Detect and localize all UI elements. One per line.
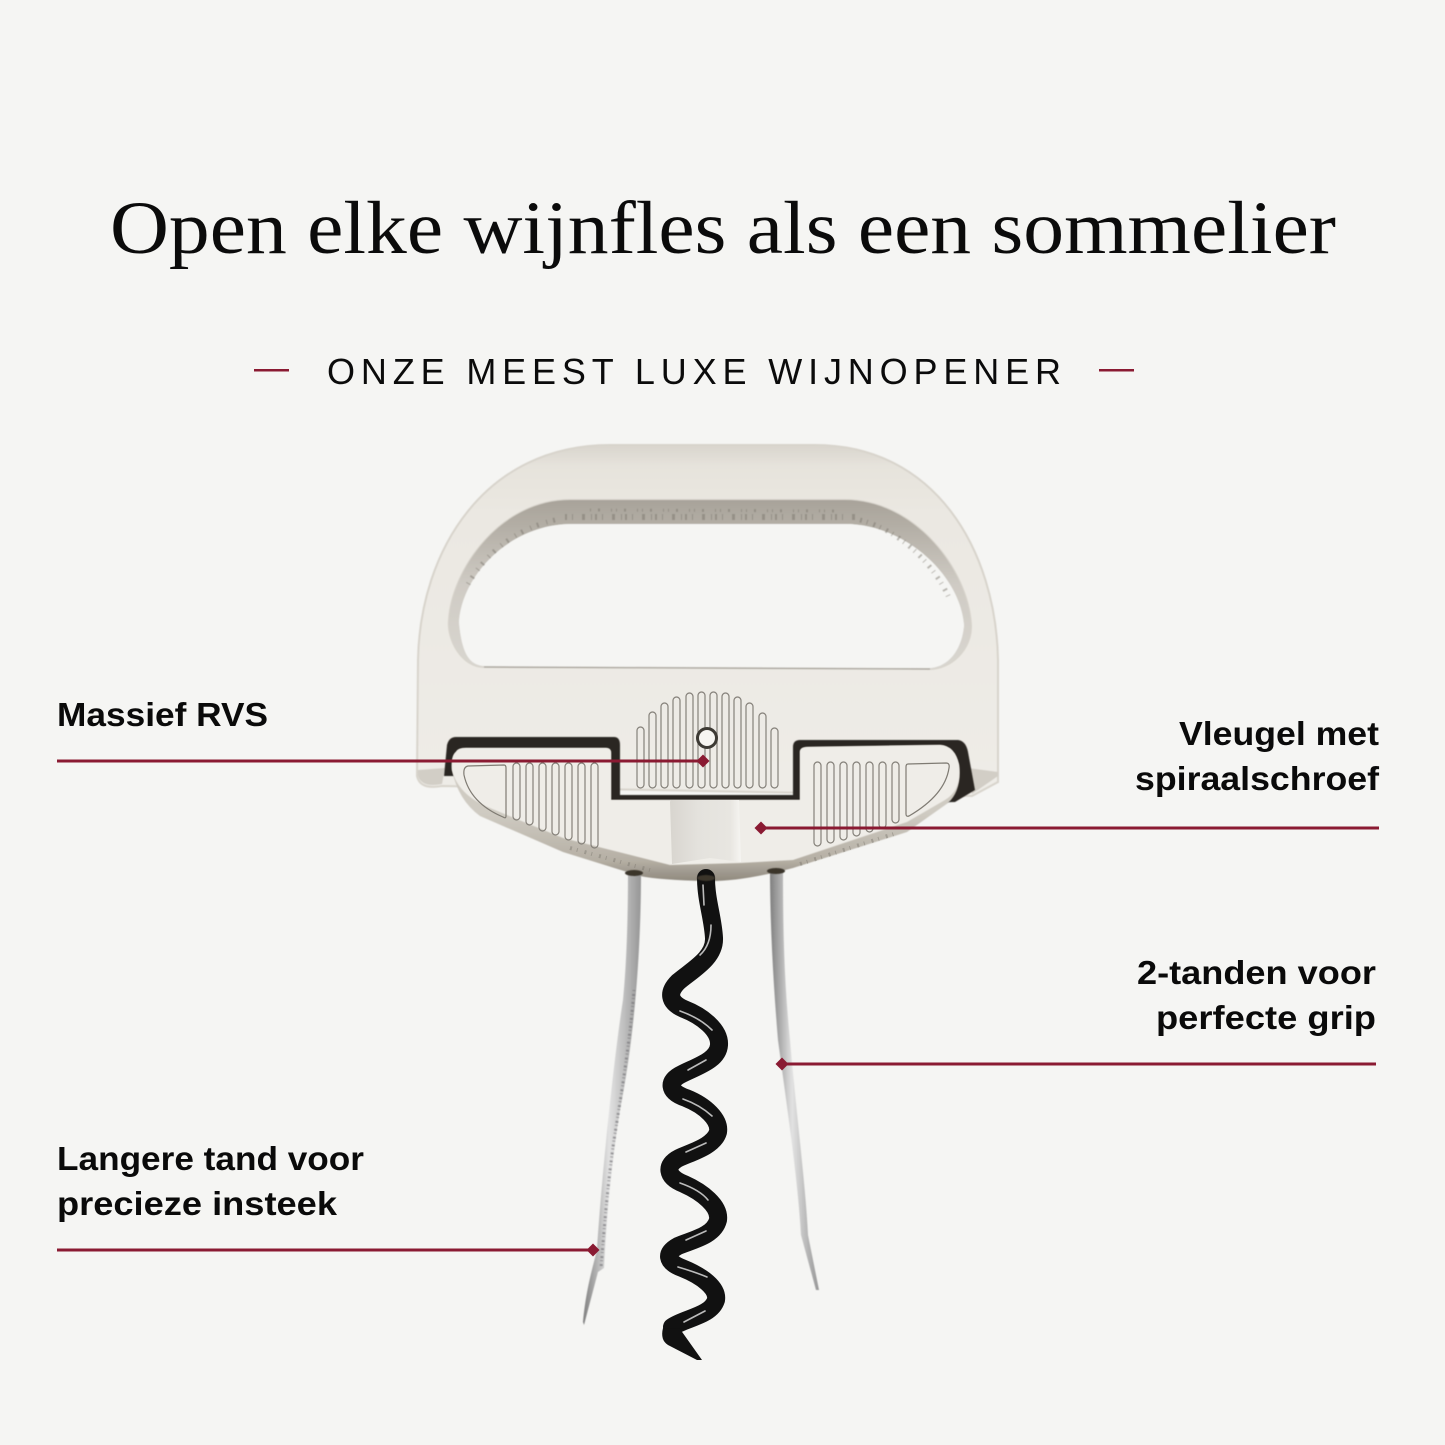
tine pins bbox=[625, 868, 785, 881]
wing top face bbox=[452, 745, 959, 865]
wing underside speckle bbox=[570, 832, 900, 870]
handle body bbox=[417, 445, 998, 796]
subtitle with dashes: ONZE MEEST LUXE WIJNOPENER bbox=[327, 351, 1061, 392]
left tine bbox=[583, 872, 641, 1325]
callout: Massief RVS: Massief RVS bbox=[57, 696, 268, 733]
callout: 2-tanden voor perfecte grip bbox=[776, 954, 1376, 1070]
right wing ribs bbox=[814, 762, 899, 846]
window lower edge bbox=[484, 667, 930, 669]
title: Open elke wijnfles als een sommelier bbox=[110, 187, 1336, 270]
wing underside bbox=[452, 745, 960, 881]
left wing ribs bbox=[513, 763, 598, 848]
lower body shade bbox=[418, 768, 998, 794]
corkscrew spiral bbox=[662, 878, 719, 1360]
rivet hole bbox=[698, 728, 716, 748]
casting speckle bbox=[465, 510, 950, 600]
callout: Langere tand voor precieze insteek: Langere tand voor bbox=[57, 1140, 364, 1177]
wing centre block bbox=[670, 800, 741, 864]
callout: Vleugel met spiraalschroef: Vleugel met bbox=[1179, 715, 1379, 752]
callout: Vleugel met spiraalschroef: spiraalschroef bbox=[1135, 760, 1380, 797]
callout: Massief RVS bbox=[57, 696, 710, 768]
right tine bbox=[770, 870, 819, 1290]
centre ribs bbox=[637, 692, 778, 788]
right pad bbox=[906, 763, 949, 816]
callout: 2-tanden voor perfecte grip: perfecte grip bbox=[1156, 999, 1376, 1036]
callout: Vleugel met spiraalschroef bbox=[754, 715, 1380, 834]
window opening bbox=[459, 524, 964, 668]
left pad bbox=[464, 765, 506, 818]
callout: Langere tand voor precieze insteek: precieze insteek bbox=[57, 1185, 338, 1222]
dark slot bbox=[444, 737, 975, 806]
window bevel bbox=[449, 500, 971, 669]
callout: 2-tanden voor perfecte grip: 2-tanden voor bbox=[1137, 954, 1376, 991]
product: corkscrew bbox=[417, 445, 998, 1360]
callout: Langere tand voor precieze insteek bbox=[57, 1140, 600, 1256]
